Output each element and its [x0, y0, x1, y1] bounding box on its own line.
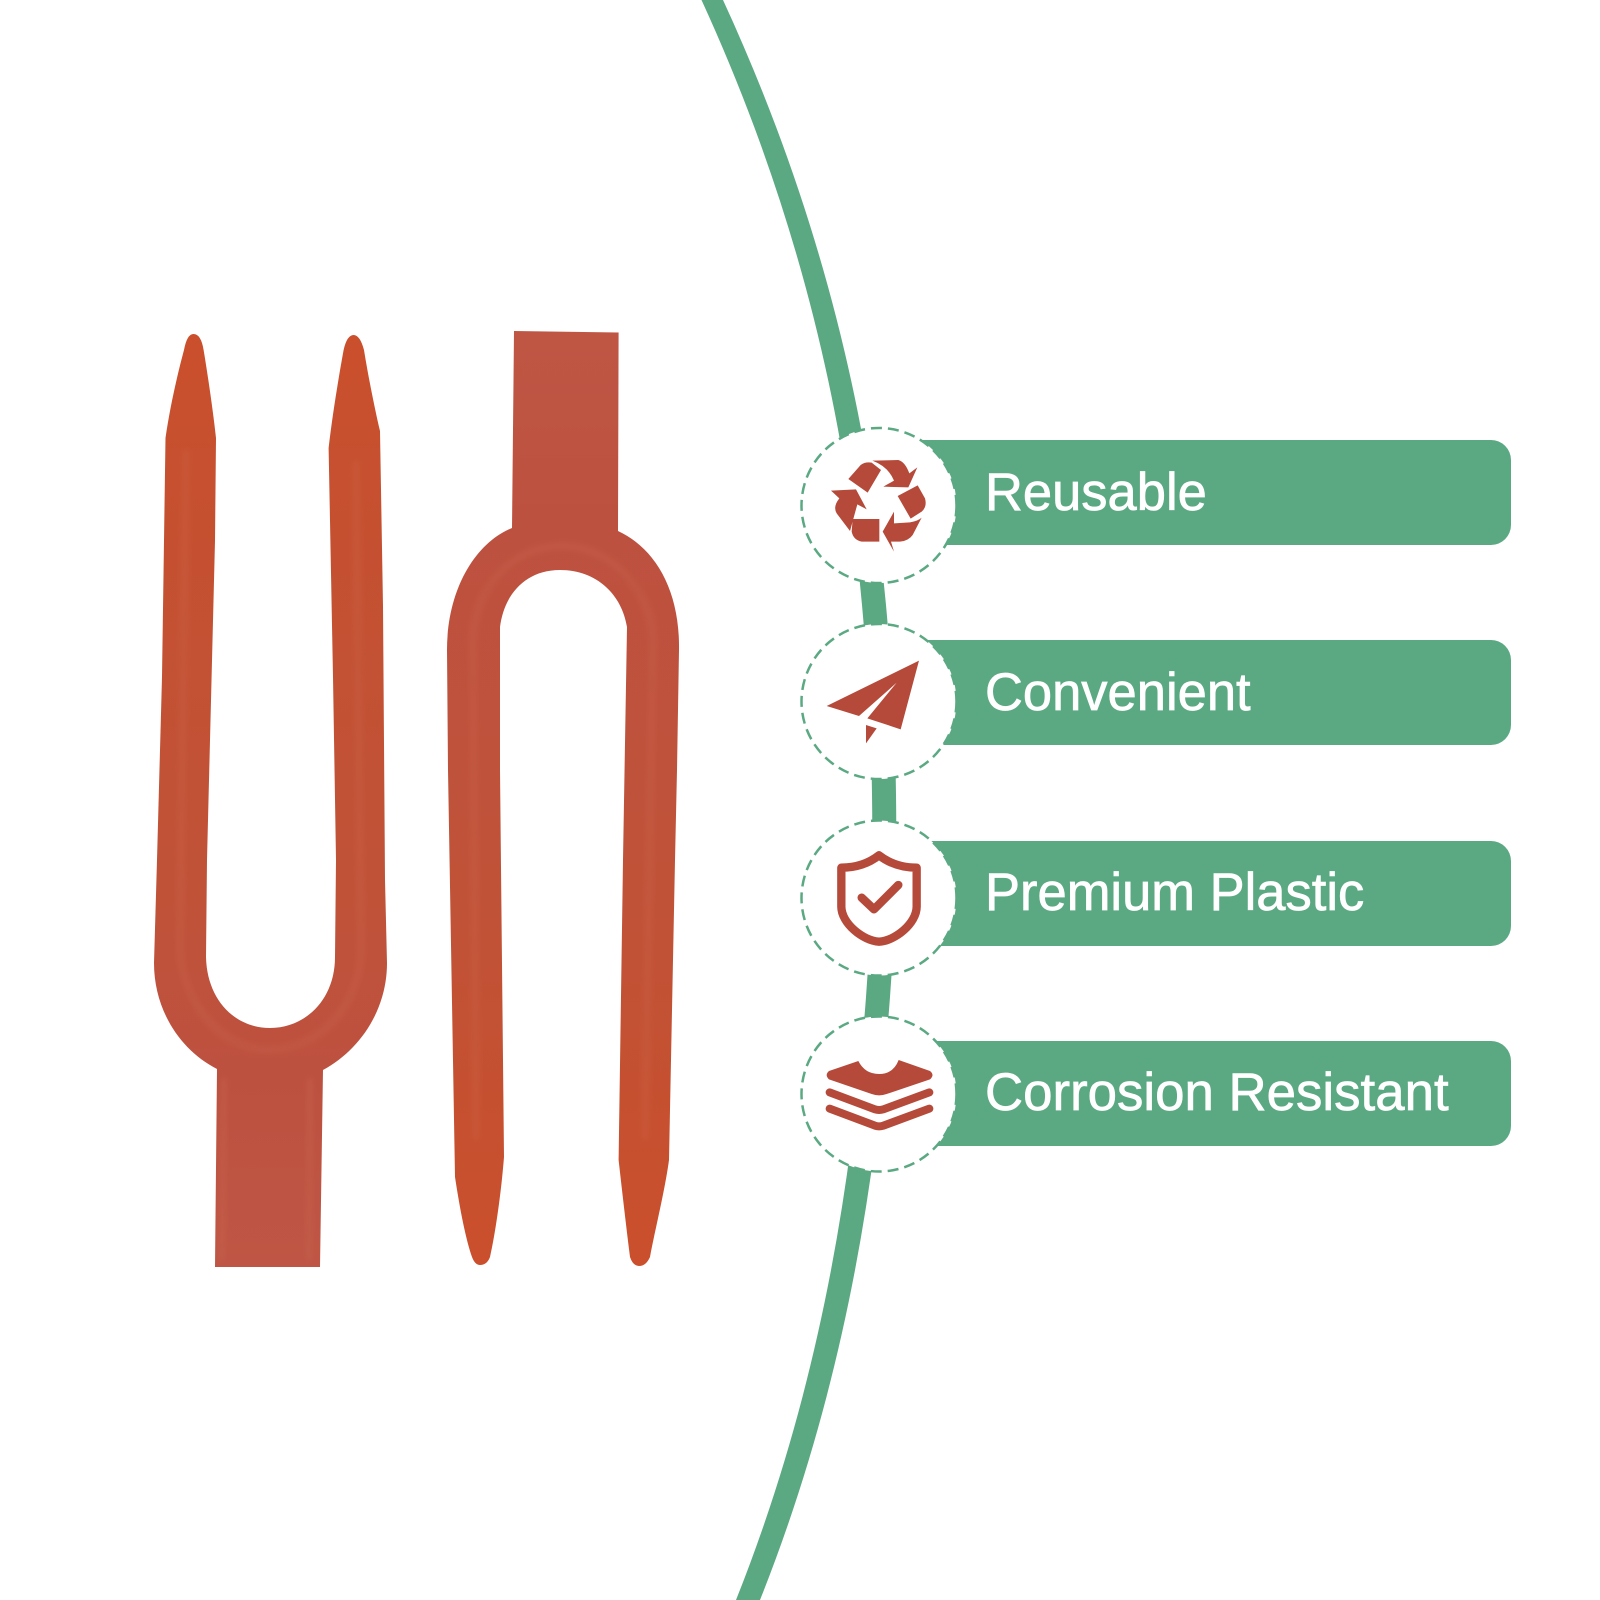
badge: reusable: [802, 428, 956, 583]
badge: premium plastic: [802, 820, 956, 976]
icon: paper plane: [827, 661, 919, 743]
feature bar: Corrosion Resistant: [880, 1041, 1511, 1146]
badge: corrosion resistant: [802, 1016, 956, 1172]
feature bar: Convenient: [880, 640, 1511, 745]
feature bar: Reusable: [880, 440, 1511, 545]
feature bar: Premium Plastic: Premium Plastic: [985, 863, 1364, 922]
feature bar: Premium Plastic: [880, 841, 1511, 946]
feature bar: Convenient: Convenient: [985, 663, 1251, 722]
badge: convenient: [802, 624, 956, 779]
feature bar: Reusable: Reusable: [985, 463, 1207, 522]
product: U stake with prongs up: [154, 334, 387, 1267]
product: U stake with prongs down: [447, 331, 679, 1266]
green arc divider: [702, 0, 896, 1600]
icon: shield with check: [841, 855, 917, 942]
icon: recycle: [831, 460, 926, 552]
icon: stacked layers: [827, 1060, 932, 1126]
feature bar: Corrosion Resistant: Corrosion Resistant: [985, 1063, 1449, 1122]
